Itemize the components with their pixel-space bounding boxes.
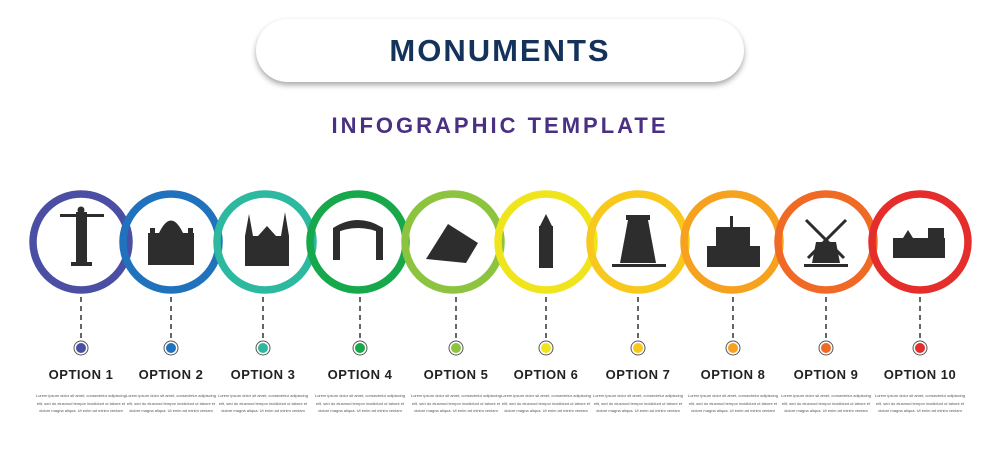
option labels xyxy=(49,367,956,382)
icon: basilica xyxy=(148,220,194,265)
circles xyxy=(33,194,968,290)
icon: castle xyxy=(893,228,945,258)
text: Lorem ipsum dolor sit amet, consectetur adipiscing elit, sed do eiusmod tempor incididunt ut labore et dolore magna aliqua. Ut enim ad minim veniam xyxy=(875,393,965,413)
text: Lorem ipsum dolor sit amet, consectetur adipiscing elit, sed do eiusmod tempor incididunt ut labore et dolore magna aliqua. Ut enim ad minim veniam xyxy=(501,393,591,413)
text: OPTION 10 xyxy=(884,367,956,382)
text: OPTION 8 xyxy=(701,367,765,382)
text: OPTION 7 xyxy=(606,367,670,382)
text: Lorem ipsum dolor sit amet, consectetur adipiscing elit, sed do eiusmod tempor incididunt ut labore et dolore magna aliqua. Ut enim ad minim veniam xyxy=(218,393,308,413)
text: Lorem ipsum dolor sit amet, consectetur adipiscing elit, sed do eiusmod tempor incididunt ut labore et dolore magna aliqua. Ut enim ad minim veniam xyxy=(36,393,126,413)
text: Lorem ipsum dolor sit amet, consectetur adipiscing elit, sed do eiusmod tempor incididunt ut labore et dolore magna aliqua. Ut enim ad minim veniam xyxy=(593,393,683,413)
icon: cathedral xyxy=(245,212,289,266)
text: OPTION 3 xyxy=(231,367,295,382)
subtitle: INFOGRAPHIC TEMPLATE xyxy=(331,113,669,138)
text: OPTION 1 xyxy=(49,367,113,382)
text: Lorem ipsum dolor sit amet, consectetur adipiscing elit, sed do eiusmod tempor incididunt ut labore et dolore magna aliqua. Ut enim ad minim veniam xyxy=(315,393,405,413)
text: Lorem ipsum dolor sit amet, consectetur adipiscing elit, sed do eiusmod tempor incididunt ut labore et dolore magna aliqua. Ut enim ad minim veniam xyxy=(781,393,871,413)
title xyxy=(256,19,744,82)
icon: castle wall xyxy=(707,216,760,267)
text: OPTION 4 xyxy=(328,367,392,382)
text: Lorem ipsum dolor sit amet, consectetur adipiscing elit, sed do eiusmod tempor incididunt ut labore et dolore magna aliqua. Ut enim ad minim veniam xyxy=(411,393,501,413)
icon: windmill xyxy=(804,220,848,267)
icons xyxy=(60,206,945,268)
icon: mayan pyramid xyxy=(612,215,666,267)
text: Lorem ipsum dolor sit amet, consectetur adipiscing elit, sed do eiusmod tempor incididunt ut labore et dolore magna aliqua. Ut enim ad minim veniam xyxy=(126,393,216,413)
icon: christ statue xyxy=(60,206,104,266)
text: Lorem ipsum dolor sit amet, consectetur adipiscing elit, sed do eiusmod tempor incididunt ut labore et dolore magna aliqua. Ut enim ad minim veniam xyxy=(688,393,778,413)
text: OPTION 9 xyxy=(794,367,858,382)
text: OPTION 5 xyxy=(424,367,488,382)
icon: pyramid xyxy=(426,224,478,263)
text: OPTION 2 xyxy=(139,367,203,382)
descriptions xyxy=(36,393,965,413)
dots xyxy=(74,341,927,355)
title: MONUMENTS xyxy=(389,33,611,68)
text: OPTION 6 xyxy=(514,367,578,382)
icon: arch xyxy=(333,220,383,260)
icon: big ben xyxy=(539,214,553,268)
connectors xyxy=(81,297,920,338)
